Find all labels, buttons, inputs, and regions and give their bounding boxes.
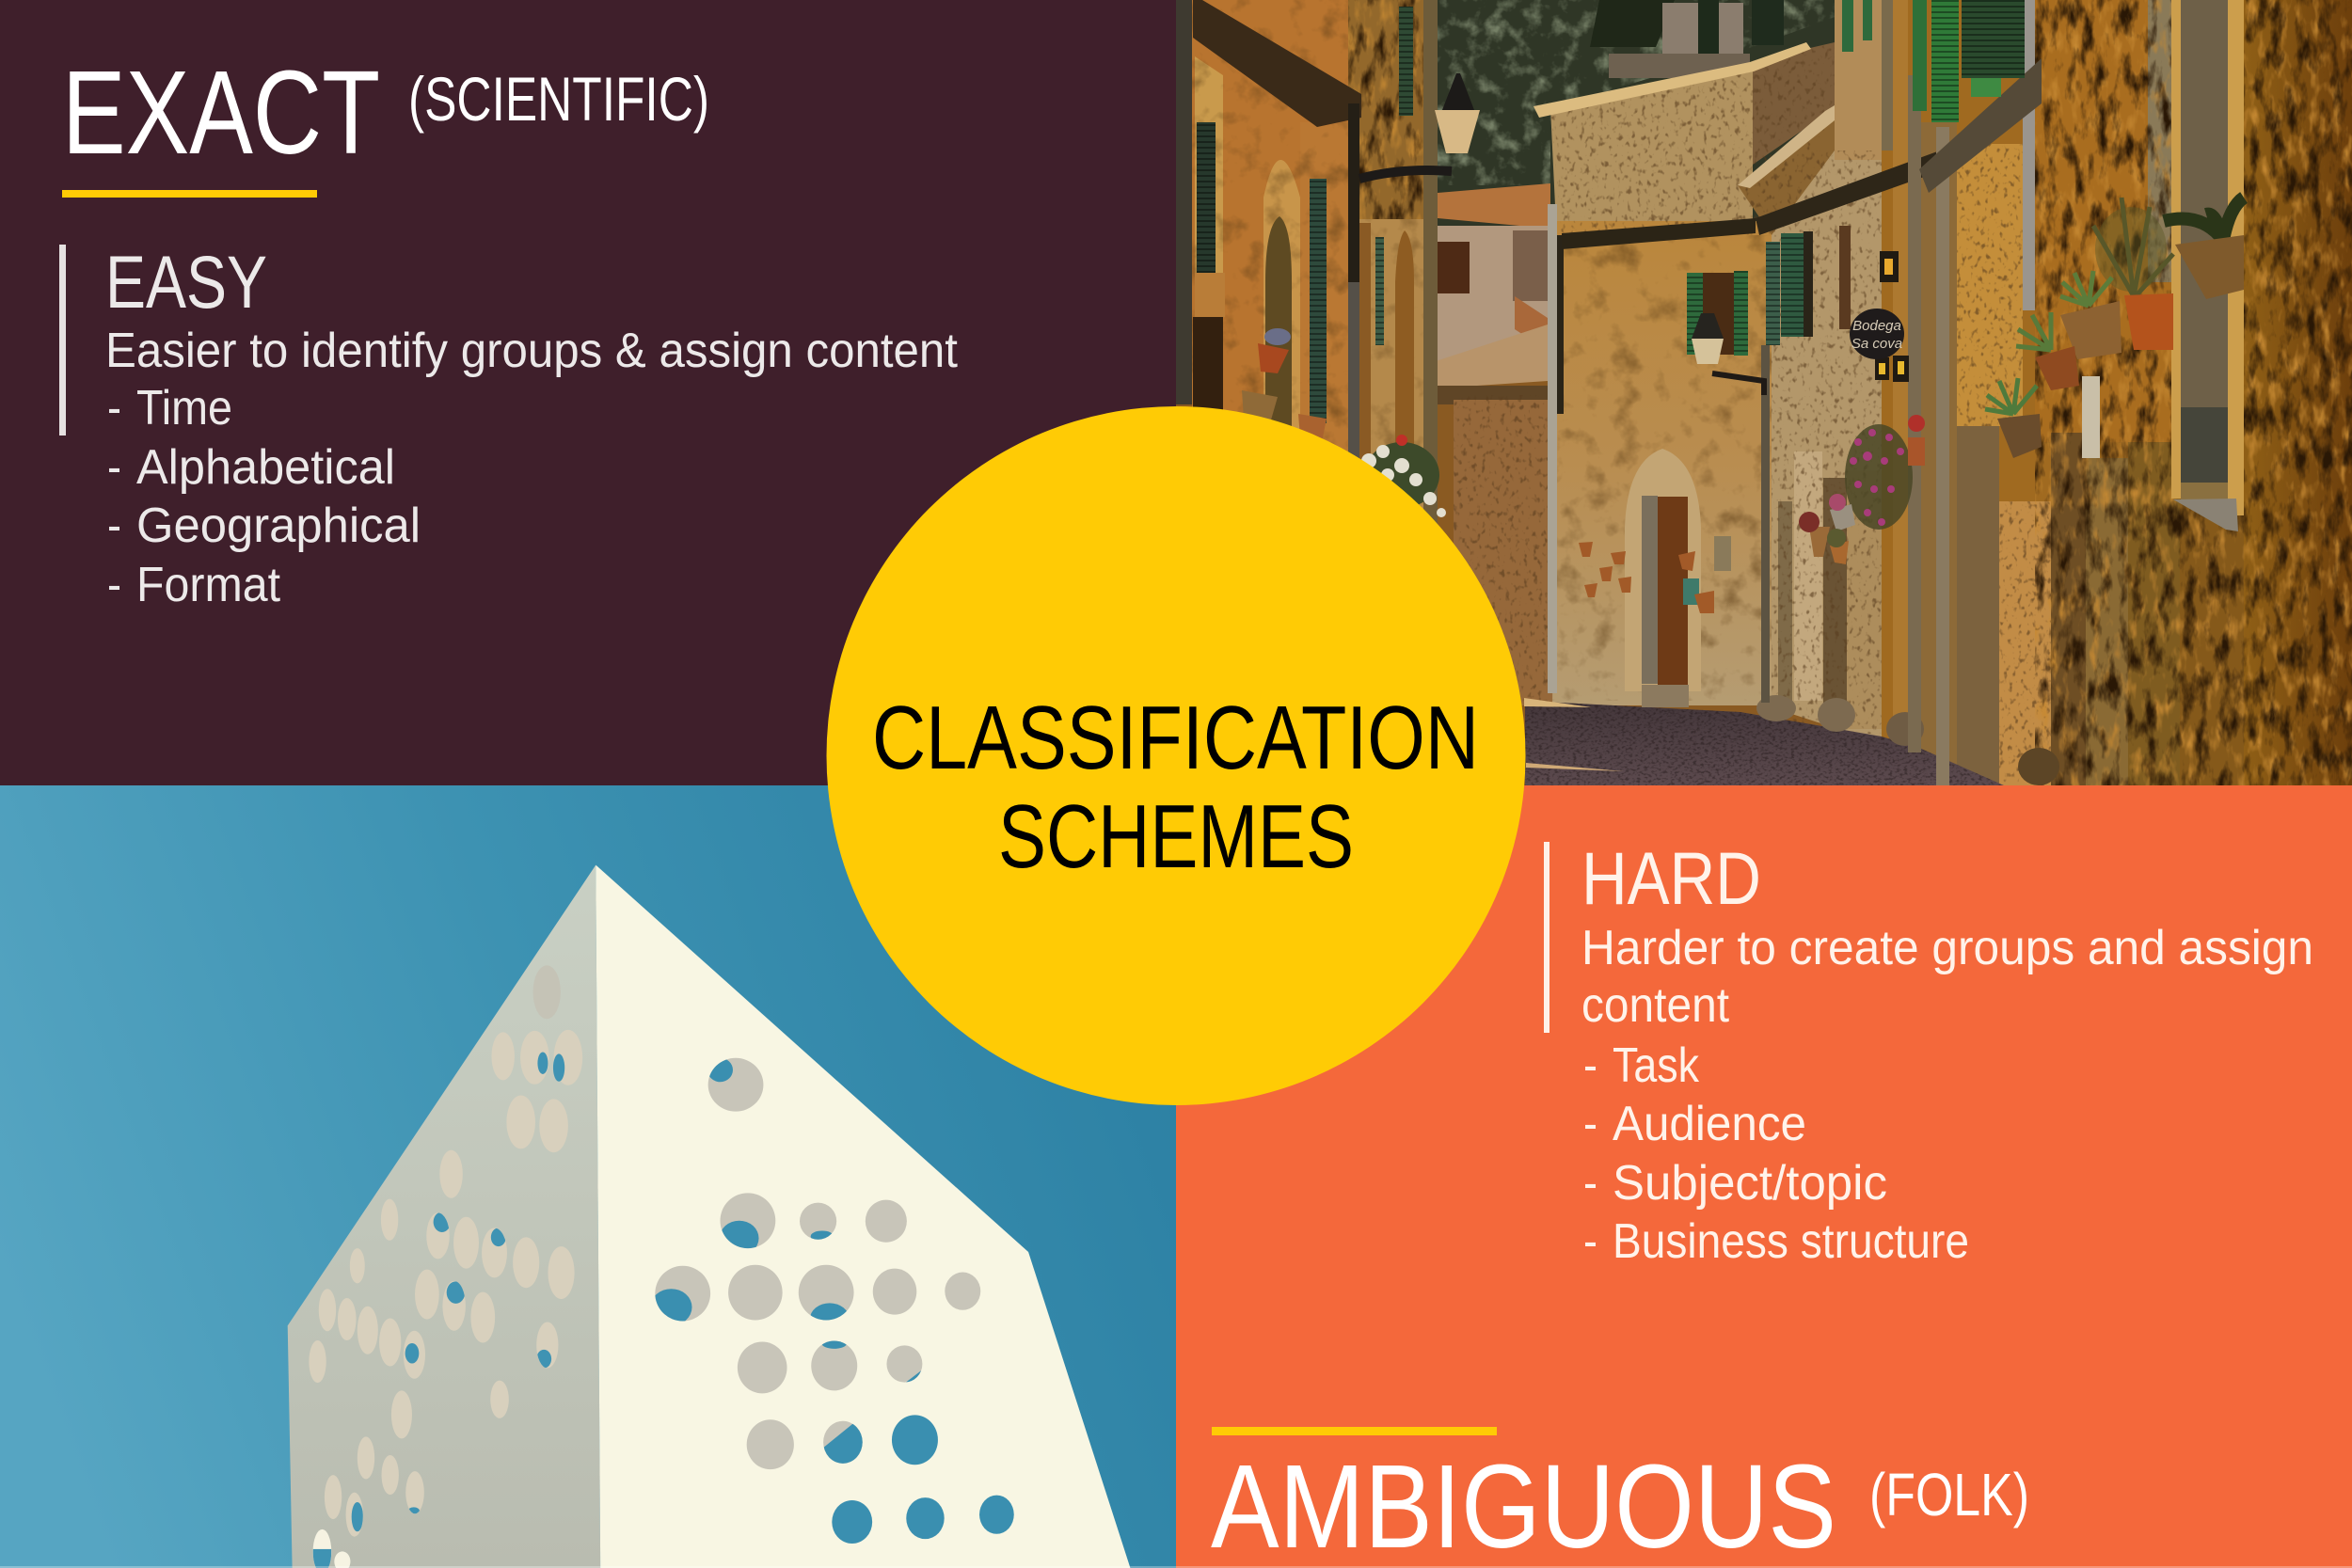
second building: [1772, 0, 1882, 743]
large terracotta pots and plants: [1985, 198, 2244, 458]
text block: easy: Alphabetical: [136, 440, 395, 495]
left building fixtures: [1193, 216, 1414, 444]
text block: hard: -: [1583, 1097, 1597, 1151]
hanging sign: Bodega: [1852, 318, 1901, 334]
panel: exact background: [0, 0, 1176, 785]
wall pots by the door: [1579, 542, 1714, 613]
bottom edge highlight: [0, 1566, 2352, 1568]
text block: hard: -: [1583, 1156, 1597, 1211]
green shutters: [1197, 0, 2025, 423]
central title: [872, 688, 1479, 887]
text block: easy: EASY: [105, 240, 267, 324]
text block: hard: -: [1583, 1214, 1597, 1269]
recessed window: [2171, 0, 2244, 531]
text block: easy: -: [107, 558, 121, 612]
text block: hard: [1581, 836, 2313, 1269]
easy divider: [59, 245, 66, 436]
second lamp: [1692, 313, 1764, 395]
right stone walls: [1882, 0, 2352, 785]
panel: ambiguous background: [1176, 785, 2352, 1568]
text block: hard: Task: [1613, 1038, 1700, 1093]
hillside and distant house: [1438, 0, 1835, 226]
text block: hard: content: [1581, 978, 1730, 1033]
text block: easy: [105, 240, 959, 612]
exact accent bar: [62, 190, 317, 198]
text block: hard: Subject/topic: [1613, 1156, 1887, 1211]
wall lanterns: [1875, 251, 1909, 382]
street lamp: [1359, 73, 1480, 179]
left face of building: [288, 865, 600, 1568]
white flowers at the corner: [1361, 435, 1446, 517]
arched doorway: [1625, 449, 1731, 707]
right face of building: [596, 865, 1130, 1568]
pipes and cables: [1193, 0, 2042, 785]
ambiguous accent bar: [1212, 1427, 1497, 1435]
building illustration: [288, 865, 1131, 1568]
text block: easy: -: [107, 499, 121, 553]
photo: village street: [1176, 0, 2352, 785]
far house and roofs: [1433, 183, 1552, 705]
text block: hard: HARD: [1581, 836, 1761, 920]
heading: ambiguous: (FOLK): [1869, 1461, 2029, 1528]
text block: hard: -: [1583, 1038, 1597, 1093]
text block: easy: -: [107, 381, 121, 436]
hanging flowers: [1799, 415, 1925, 564]
heading: exact: EXACT: [62, 46, 380, 179]
text block: easy: Format: [136, 558, 281, 612]
roof tile edges: [1534, 42, 1835, 188]
central yellow circle: [826, 406, 1526, 1105]
photo: white perforated building against blue sky: [0, 785, 1176, 1568]
text block: hard: Harder to create groups and assign: [1581, 921, 2313, 975]
heading: exact: [62, 46, 709, 179]
hard divider: [1544, 842, 1549, 1033]
text block: easy: Time: [136, 381, 232, 436]
heading: exact: (SCIENTIFIC): [408, 64, 709, 134]
hanging sign: Sa cova: [1851, 336, 1902, 352]
text block: easy: Geographical: [136, 499, 421, 553]
text block: easy: -: [107, 440, 121, 495]
text block: hard: Audience: [1613, 1097, 1806, 1151]
central title: CLASSIFICATION: [872, 688, 1479, 788]
central title: SCHEMES: [998, 786, 1354, 887]
central building: [1550, 42, 1835, 705]
hanging sign: [1850, 309, 1904, 359]
road: [1524, 695, 2059, 785]
text block: easy: Easier to identify groups & assign content: [105, 324, 959, 378]
stone mottling: [1176, 0, 2352, 785]
left building: [1176, 0, 1438, 564]
text block: hard: Business structure: [1613, 1214, 1969, 1269]
